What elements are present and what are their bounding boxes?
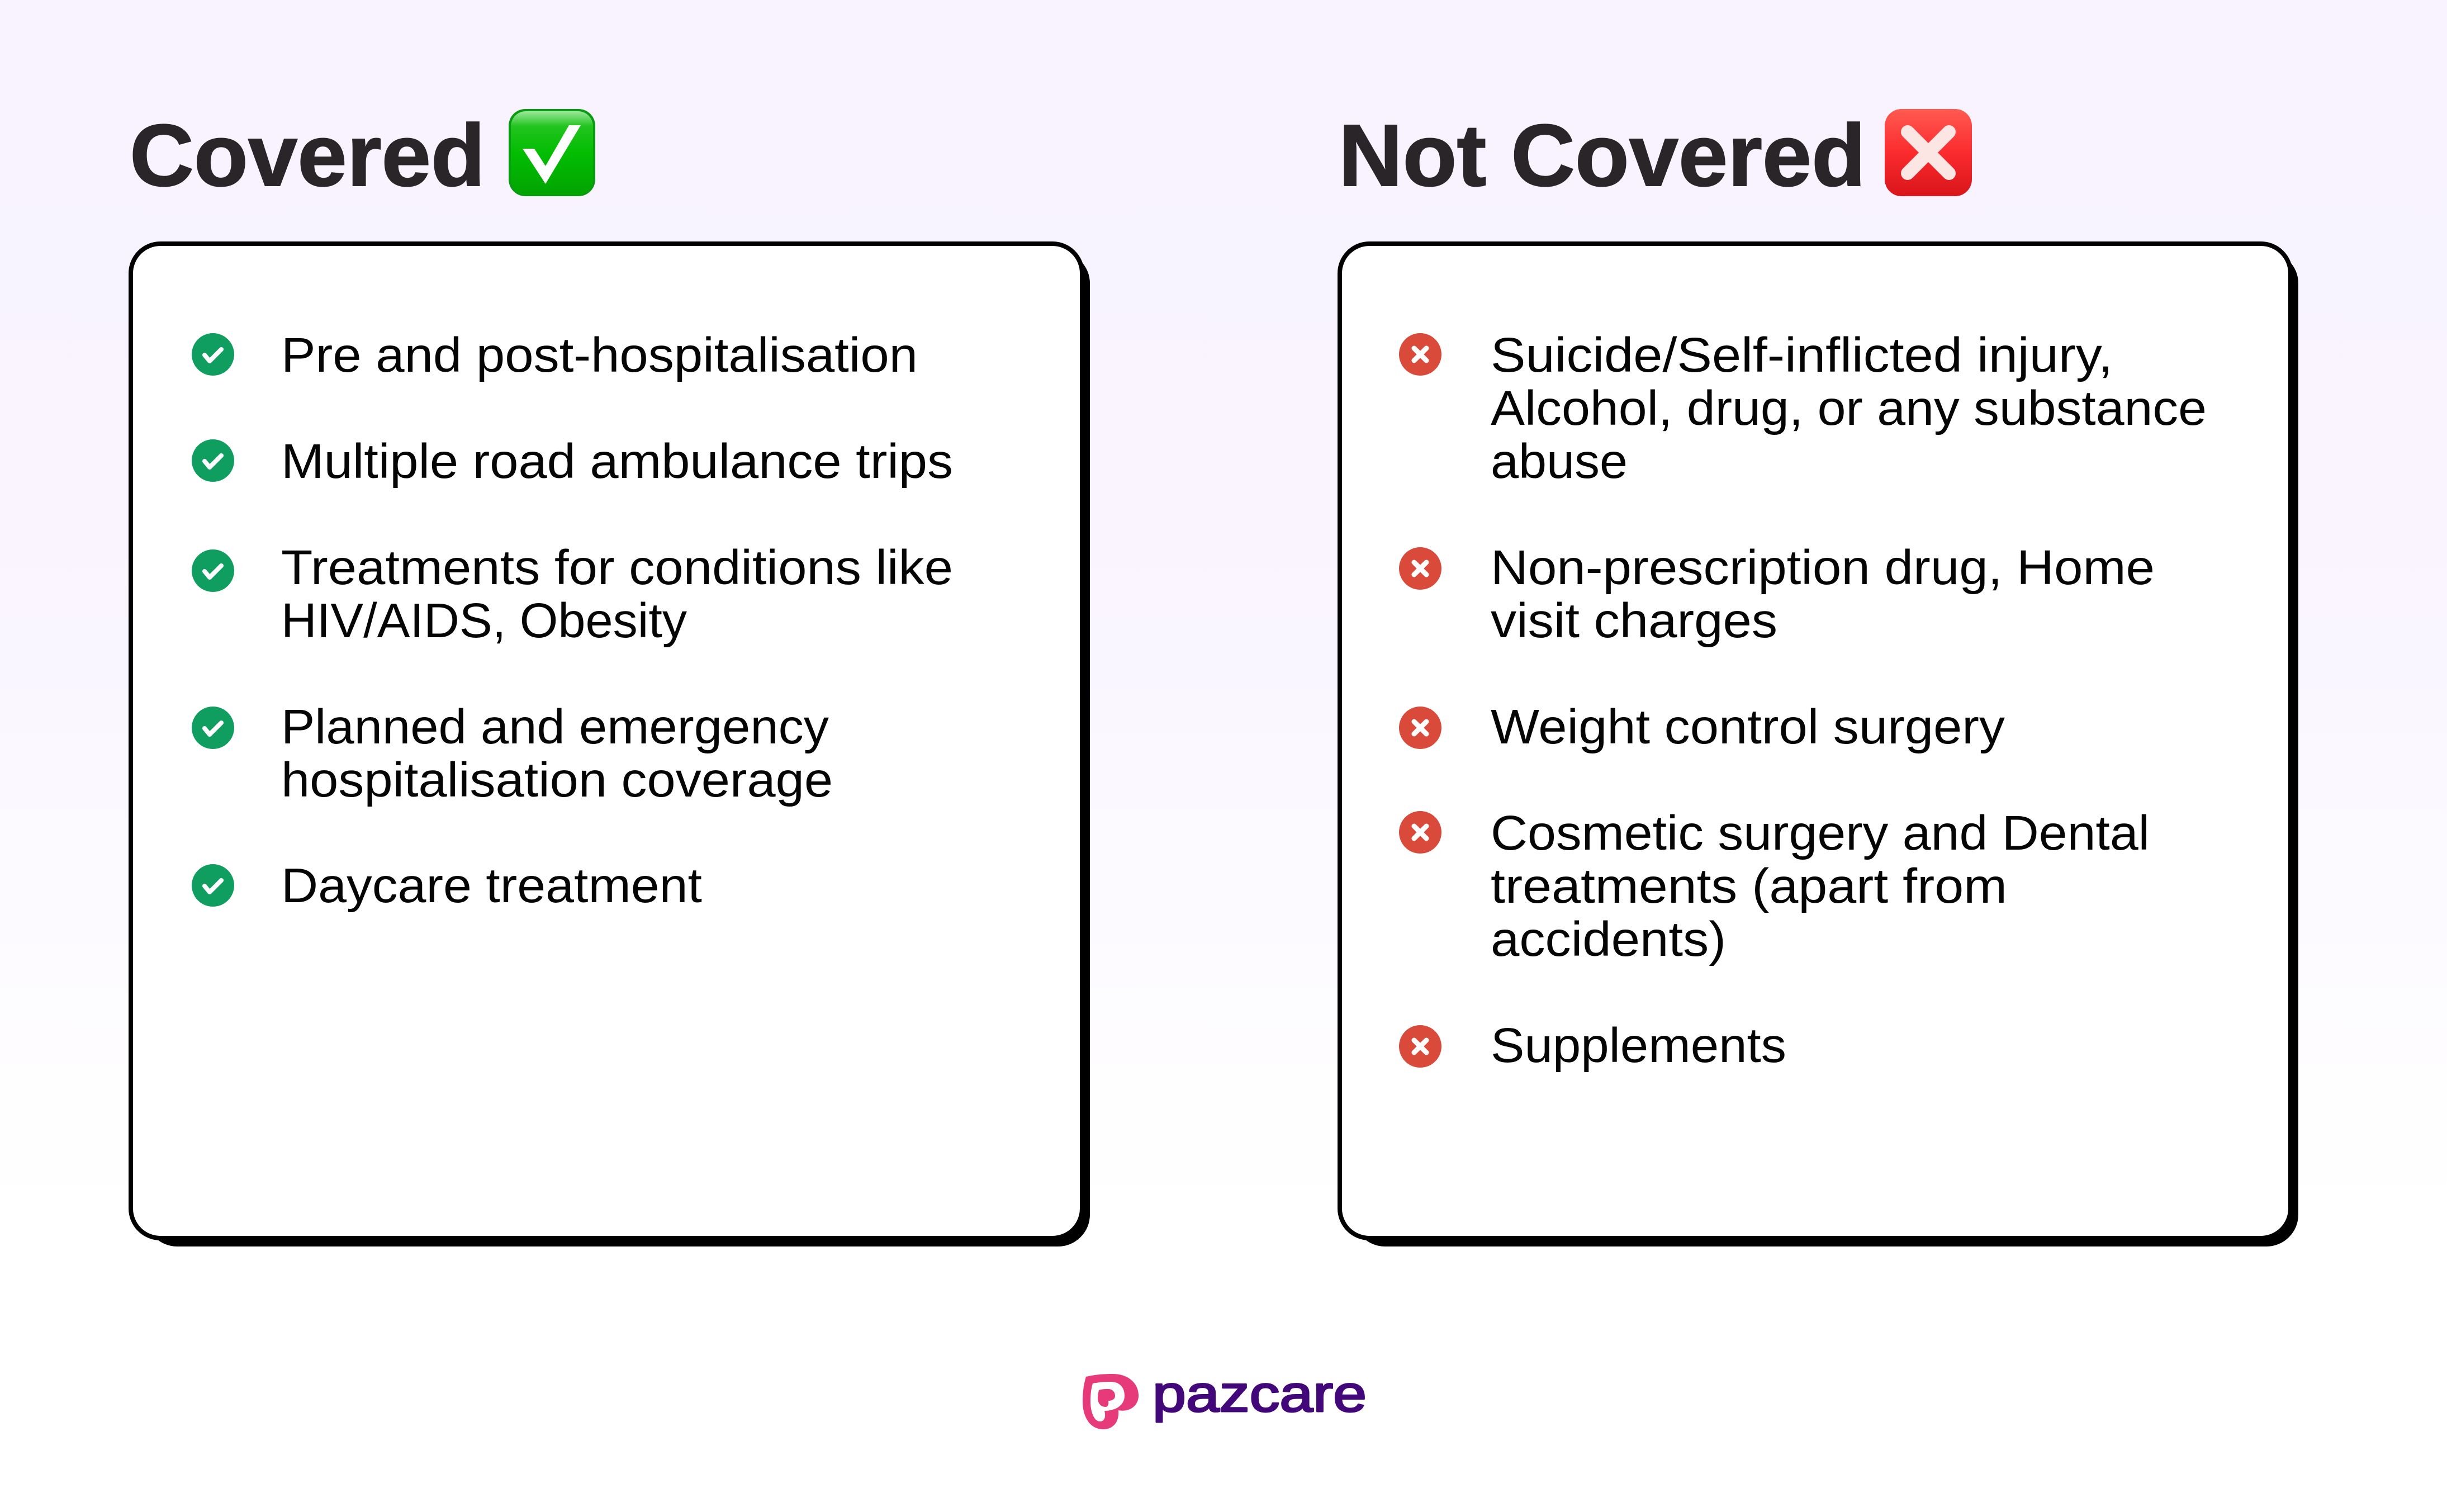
item: Pre and post-hospitalisation: Pre and post-hospitalisation xyxy=(281,328,918,382)
logo: pazcare xyxy=(1083,1366,1367,1429)
item: Cosmetic surgery and Dental treatments xyxy=(1399,806,2150,966)
item: Supplements: Supplements xyxy=(1491,1018,1786,1073)
item: Suicide, self-inflicted injury, substance abuse: abuse xyxy=(1491,434,1628,489)
item: Non-prescription drug, Home visit charges xyxy=(1399,541,2155,648)
item: Suicide, self-inflicted injury, substance abuse xyxy=(1399,328,2207,489)
card: covered xyxy=(131,244,1090,1246)
panel: covered xyxy=(131,244,1090,1246)
wordmark: pazcare xyxy=(1153,1366,1367,1423)
item: Planned and emergency hospitalisation coverage: hospitalisation coverage xyxy=(281,753,833,807)
icon: green check emoji xyxy=(509,109,595,196)
item: Suicide, self-inflicted injury, substance abuse: Suicide/Self-inflicted injury, xyxy=(1491,328,2113,382)
item: Cosmetic surgery and Dental treatments: Cosmetic surgery and Dental xyxy=(1491,806,2150,860)
item: Non-prescription drug, Home visit charges: visit charges xyxy=(1491,594,1777,648)
item: Planned and emergency hospitalisation coverage xyxy=(192,700,833,807)
item: Treatments for conditions like HIV/AIDS, Obesity: HIV/AIDS, Obesity xyxy=(281,594,687,648)
item: Treatments for conditions like HIV/AIDS, Obesity: Treatments for conditions like xyxy=(281,541,953,595)
item: Treatments for conditions like HIV/AIDS, Obesity xyxy=(192,541,953,648)
item: Multiple road ambulance trips: Multiple road ambulance trips xyxy=(281,434,953,489)
item: Cosmetic surgery and Dental treatments: treatments (apart from xyxy=(1491,859,2007,913)
item: Cosmetic surgery and Dental treatments: accidents) xyxy=(1491,912,1726,966)
item: Weight control surgery: Weight control surgery xyxy=(1491,700,2005,754)
icon: red cross emoji xyxy=(1885,109,1972,196)
card: not covered xyxy=(1340,244,2298,1246)
panel: not covered xyxy=(1340,244,2298,1246)
heading: Not Covered: Not Covered xyxy=(1339,107,1866,205)
item: Daycare treatment: Daycare treatment xyxy=(281,859,702,913)
item: Planned and emergency hospitalisation coverage: Planned and emergency xyxy=(281,700,829,754)
item: Non-prescription drug, Home visit charges: Non-prescription drug, Home xyxy=(1491,541,2155,595)
item: Suicide, self-inflicted injury, substance abuse: Alcohol, drug, or any substance xyxy=(1491,381,2207,435)
heading: Covered: Covered xyxy=(130,107,485,205)
icon: pazcare mark xyxy=(1083,1374,1139,1429)
